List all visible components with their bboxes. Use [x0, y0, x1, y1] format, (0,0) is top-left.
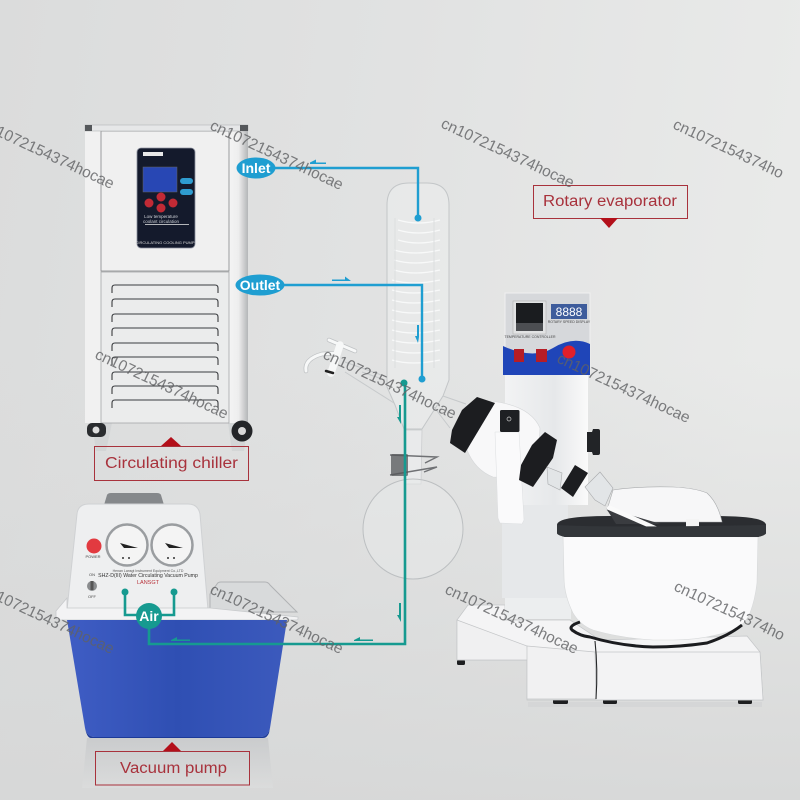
chiller control panel [135, 148, 195, 248]
watermarks: cn1072154374hocae [442, 581, 581, 658]
watermarks: cn1072154374ho [670, 116, 786, 182]
outlet badge [236, 274, 284, 296]
base reflection [457, 665, 762, 707]
outlet badge: Outlet [240, 277, 281, 293]
condenser [387, 183, 449, 429]
black collars [450, 397, 588, 497]
inlet badge: Inlet [242, 160, 271, 176]
pump gauges [106, 524, 192, 566]
label: rotary evaporator: Rotary evaporator [543, 193, 677, 210]
glassware [306, 183, 466, 579]
glass stopcock [306, 340, 355, 373]
pump model text [98, 569, 198, 586]
air badge [136, 603, 162, 629]
watermarks: cn1072154374hocae [207, 581, 346, 658]
chiller wheels [87, 420, 252, 442]
evaporator feet [457, 660, 752, 704]
watermarks: cn1072154374hocae [92, 346, 231, 423]
line end dots [414, 214, 426, 382]
vacuum line and air badge [122, 380, 408, 644]
watermarks: cn1072154374hocae [438, 115, 577, 192]
bath back rim [557, 516, 766, 537]
label: vacuum pump [96, 742, 250, 785]
pump switch: ON [89, 572, 95, 577]
water bath [557, 516, 766, 640]
watermarks [0, 115, 787, 658]
blue water tank [67, 620, 287, 737]
watermarks: cn1072154374hocae [554, 350, 693, 427]
pump power button [86, 538, 102, 554]
chiller control panel: coolant circulation [143, 219, 180, 224]
pump model text: SHZ-D(III) Water Circulating Vacuum Pump [98, 573, 198, 579]
pump white head [67, 504, 208, 610]
pump switch: OFF [88, 594, 97, 599]
pump switch [87, 572, 97, 599]
glass neck into flask [547, 467, 613, 506]
rotating flask [606, 487, 722, 529]
chiller control panel: CIRCULATING COOLING PUMP [135, 240, 195, 245]
receiving flask [363, 479, 463, 579]
motor housing [467, 401, 540, 524]
pump lid knob [104, 493, 164, 505]
chiller ventilation slats [112, 285, 218, 408]
flow arrows [310, 160, 419, 343]
control box: ROTARY SPEED DISPLAY [548, 320, 591, 324]
evaporator base [457, 605, 763, 700]
vacuum pump: POWER [85, 554, 101, 559]
control box: TEMPERATURE CONTROLLER [504, 335, 556, 339]
pump model text: Henan Lansgt Instrument Equipment Co.,LTD [113, 569, 184, 573]
watermarks: cn1072154374hocae [320, 346, 459, 423]
circulating chiller [85, 125, 252, 451]
flow arrows [171, 405, 401, 641]
glass side tube [345, 362, 466, 428]
pump model text: LANSGT [137, 580, 160, 586]
bath front rim [557, 525, 766, 537]
label: vacuum pump: Vacuum pump [120, 760, 227, 777]
chiller control panel: Low temperature [144, 214, 178, 219]
air badge: Air [139, 608, 159, 624]
coolant lines and inlet/outlet [236, 158, 426, 382]
evaporator column [502, 375, 588, 619]
label: rotary evaporator [534, 186, 688, 228]
rotary evaporator [450, 293, 766, 707]
vacuum pump [56, 493, 298, 788]
label: circulating chiller [94, 437, 248, 480]
pump ledge [56, 598, 298, 620]
adjustment knob [587, 429, 600, 455]
clamp [390, 454, 437, 476]
line end dots [122, 380, 408, 596]
flask neck [404, 430, 422, 484]
label: circulating chiller: Circulating chiller [105, 455, 238, 472]
black hose [571, 622, 742, 647]
inlet badge [236, 158, 276, 178]
control box [503, 293, 591, 375]
control box: 8888 [556, 305, 583, 319]
watermarks: cn1072154374hocae [207, 117, 346, 194]
watermarks: cn1072154374ho [671, 578, 787, 644]
pump side cover [210, 582, 297, 612]
